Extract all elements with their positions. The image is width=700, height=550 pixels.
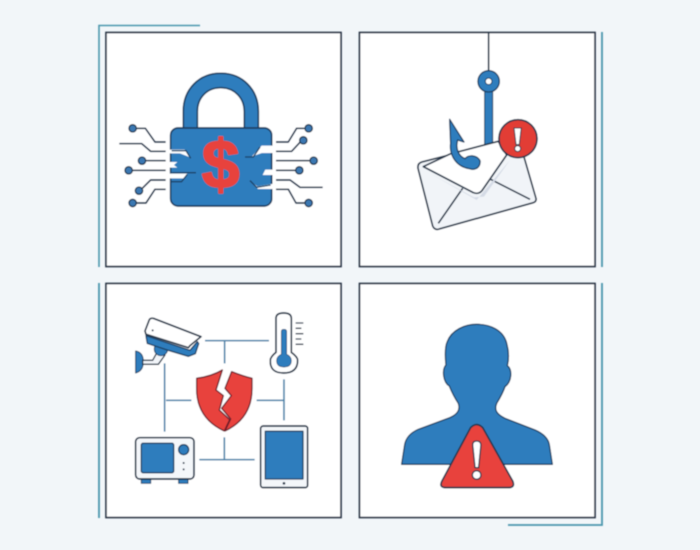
panel: locked money with circuit traces [99,26,341,267]
icon: person silhouette with warning triangle [402,324,552,488]
panel: compromised smart devices [99,283,341,518]
icon: connected devices around broken shield [136,313,308,488]
icon: thermometer [270,313,303,373]
icon: security camera [136,318,201,373]
icon: fishing hook with envelope and alert [418,32,537,229]
panel: phishing hook and envelope [360,32,602,267]
icon: tablet [261,426,308,488]
icon: broken shield [197,370,252,431]
icon: padlock with dollar sign: $ [202,127,240,203]
panel: person with warning [360,283,602,525]
icon: microwave [136,438,194,483]
icon: padlock with dollar sign [119,73,323,207]
